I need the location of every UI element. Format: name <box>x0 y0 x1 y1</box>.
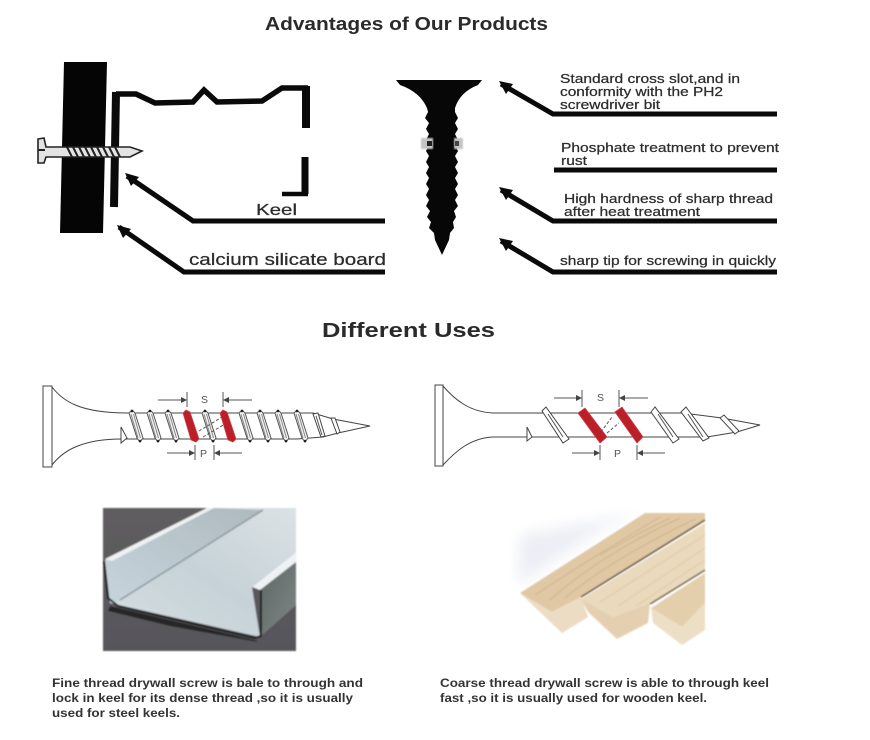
batten 2 <box>581 523 705 617</box>
dimension P: P <box>614 448 621 460</box>
diagram: coarse thread screw <box>435 385 760 466</box>
callout: cross slot <box>499 71 777 114</box>
callout: phosphate treatment <box>554 140 779 170</box>
channel shadow edge <box>104 561 261 638</box>
threads <box>129 410 340 442</box>
photo: wooden battens <box>518 513 705 645</box>
text: coarse thread description: fast ,so it is usually used for wooden keel. <box>440 693 707 705</box>
dimension P <box>167 445 242 460</box>
left wall <box>106 508 263 603</box>
highlighted red threads <box>183 410 236 442</box>
text: coarse thread description <box>440 678 769 705</box>
callout: high hardness thread: High hardness of sharp thread <box>564 191 773 206</box>
callout: cross slot: Standard cross slot,and in <box>560 71 740 86</box>
gap shadow <box>581 520 705 597</box>
callout: high hardness thread <box>499 187 777 221</box>
icon: drywall screw through board <box>38 138 142 163</box>
diagram: fine thread screw <box>43 386 370 467</box>
text: fine thread description: lock in keel for its dense thread ,so it is usually <box>52 693 354 705</box>
dimension S: S <box>597 392 604 404</box>
label: Keel: Keel <box>256 202 297 219</box>
screw body <box>43 386 370 467</box>
callout: phosphate treatment: rust <box>561 153 587 168</box>
arrow: board callout <box>117 225 385 272</box>
dimension S <box>554 390 648 407</box>
callout: sharp tip <box>499 238 777 272</box>
callout: cross slot: conformity with the PH2 <box>560 84 723 99</box>
batten 3 <box>651 573 705 627</box>
right wall outer face <box>260 562 296 637</box>
calcium silicate board <box>60 62 107 233</box>
dimension S <box>158 392 252 407</box>
arrow: keel callout <box>125 173 385 221</box>
callout: sharp tip: sharp tip for screwing in quickly <box>560 253 777 268</box>
title: Advantages of Our Products: Advantages of Our Products <box>265 14 548 34</box>
callout: phosphate treatment: Phosphate treatment to prevent <box>561 140 779 155</box>
panel: keel installation diagram <box>38 62 386 272</box>
threads <box>542 407 739 443</box>
dimension P: P <box>200 448 207 460</box>
label: calcium silicate board: calcium silicate board <box>189 251 386 269</box>
text: coarse thread description: Coarse thread drywall screw is able to through keel <box>440 678 769 690</box>
dimension S: S <box>201 394 208 406</box>
photo: steel keel channel <box>103 508 296 651</box>
dimension P <box>572 445 665 460</box>
highlighted red threads <box>578 407 643 443</box>
left lip highlight <box>105 508 214 561</box>
batten 1 <box>520 513 705 612</box>
title: Different Uses: Different Uses <box>322 320 495 342</box>
icon: black drywall screw <box>396 80 482 255</box>
text: fine thread description: Fine thread drywall screw is bale to through and <box>52 678 363 690</box>
text: fine thread description: used for steel keels. <box>52 708 180 720</box>
screw body <box>435 385 760 466</box>
text: fine thread description <box>52 678 363 720</box>
keel profile <box>114 86 308 207</box>
callout: high hardness thread: after heat treatment <box>564 204 700 219</box>
callout: cross slot: screwdriver bit <box>560 97 660 112</box>
panel: screw features <box>396 71 779 272</box>
right lip highlight <box>252 552 296 590</box>
